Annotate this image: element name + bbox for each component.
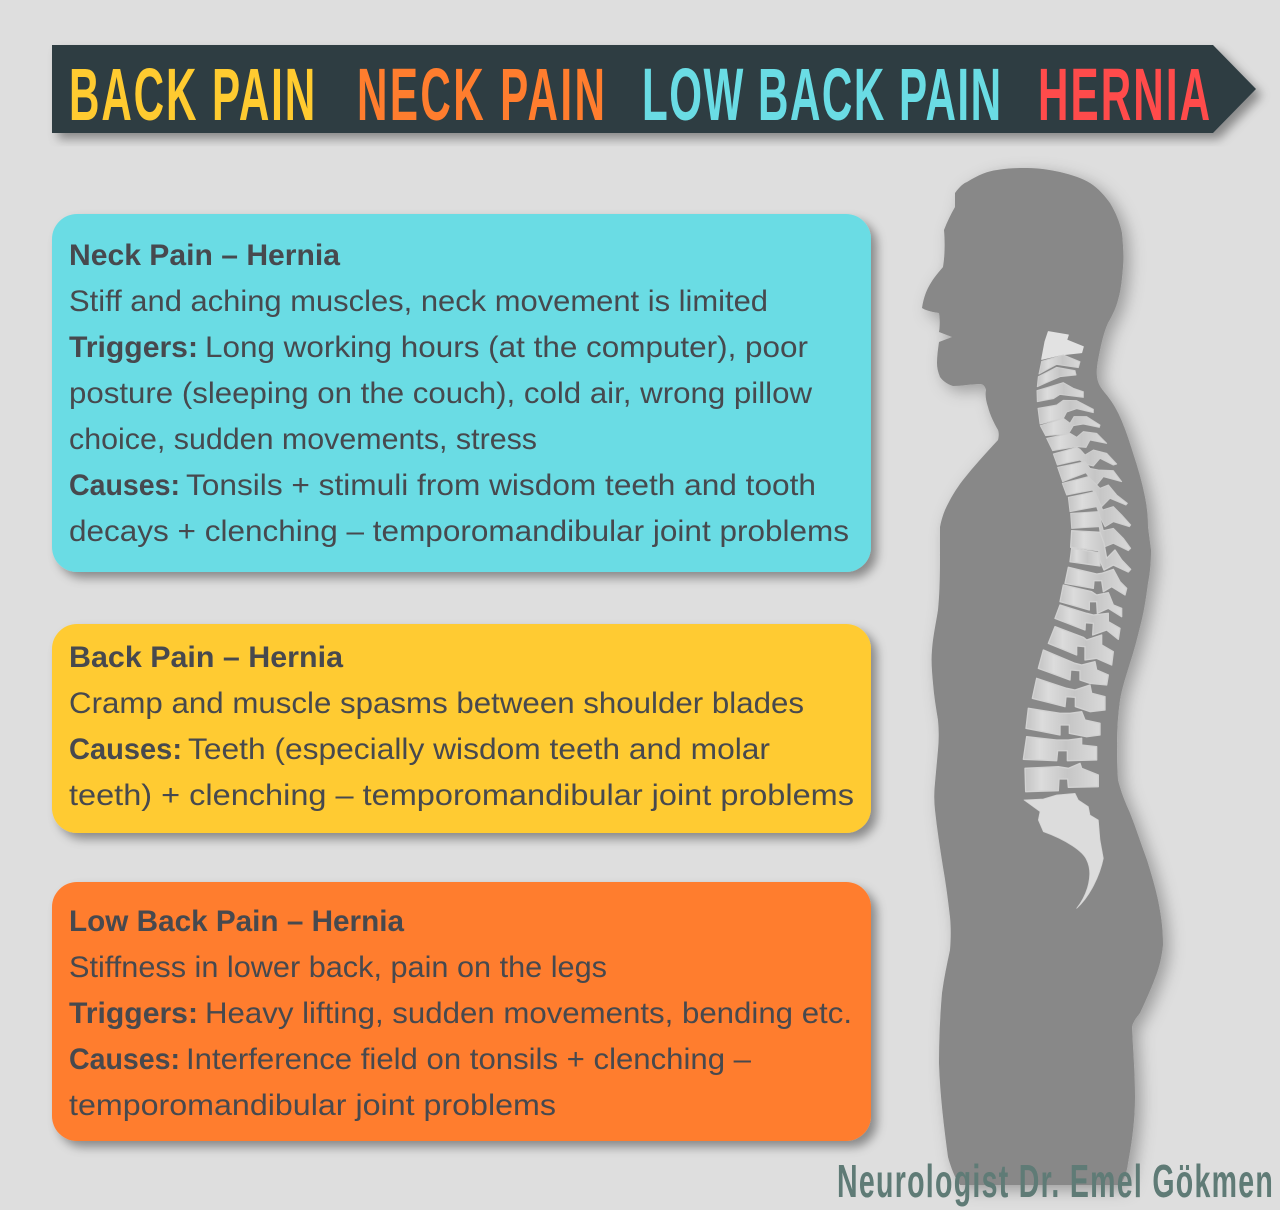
body silhouette: [922, 168, 1163, 1185]
low back triggers: Triggers:: [69, 997, 198, 1030]
heading: neck pain: NECK PAIN: [357, 52, 605, 136]
low back causes: [69, 1043, 752, 1122]
low back panel heading: Low Back Pain – Hernia: [69, 905, 405, 938]
low back panel background: [52, 882, 871, 1141]
panel: back pain: [52, 624, 871, 833]
banner shape: [52, 45, 1256, 133]
neck panel heading: Neck Pain – Hernia: [69, 239, 341, 272]
spine: [1023, 332, 1131, 908]
back causes: Teeth (especially wisdom teeth and molar: [188, 733, 770, 766]
neck causes: Tonsils + stimuli from wisdom teeth and tooth: [186, 469, 816, 502]
back causes: Causes:: [69, 733, 182, 766]
neck triggers: Triggers:: [69, 331, 198, 364]
low back causes: temporomandibular joint problems: [69, 1089, 556, 1122]
low back triggers: Heavy lifting, sudden movements, bending etc.: [205, 997, 852, 1030]
low back symptoms: Stiffness in lower back, pain on the legs: [69, 951, 607, 984]
back panel background: [52, 624, 871, 833]
heading: hernia: HERNIA: [1038, 52, 1210, 136]
heading: back pain: BACK PAIN: [69, 52, 315, 136]
back causes: teeth) + clenching – temporomandibular joint problems: [69, 779, 854, 812]
neck triggers: posture (sleeping on the couch), cold air, wrong pillow: [69, 377, 813, 410]
neck triggers: choice, sudden movements, stress: [69, 423, 537, 456]
human body silhouette with spine: [922, 168, 1163, 1185]
low back causes: Interference field on tonsils + clenching –: [186, 1043, 752, 1076]
neck panel background: [52, 214, 871, 572]
panel: neck pain: [52, 214, 871, 572]
back symptoms: Cramp and muscle spasms between shoulder blades: [69, 687, 804, 720]
sacrum: [1024, 793, 1103, 908]
title arrow banner: [52, 45, 1256, 136]
lower vertebrae: [1023, 531, 1131, 792]
back causes: [69, 733, 854, 812]
neck causes: Causes:: [69, 469, 180, 502]
signature: Neurologist Dr. Emel Gökmen: [837, 1156, 1273, 1208]
neck triggers: [69, 331, 813, 456]
neck causes: [69, 469, 849, 548]
neck triggers: Long working hours (at the computer), poor: [205, 331, 808, 364]
upper vertebrae: [1037, 332, 1131, 551]
neck symptoms: Stiff and aching muscles, neck movement is limited: [69, 285, 768, 318]
heading: low back pain: LOW BACK PAIN: [642, 52, 1001, 136]
back panel heading: Back Pain – Hernia: [69, 641, 344, 674]
low back causes: Causes:: [69, 1043, 180, 1076]
neck causes: decays + clenching – temporomandibular joint problems: [69, 515, 849, 548]
panel: low back pain: [52, 882, 871, 1141]
